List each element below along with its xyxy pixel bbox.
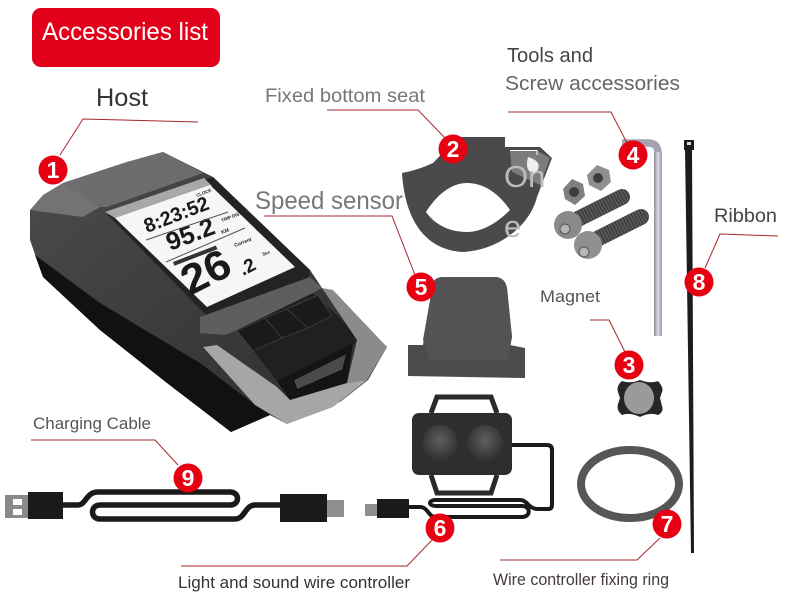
lower bezel band [200, 277, 322, 335]
icon: screws and nuts [554, 165, 641, 259]
icon: charging cable [5, 492, 344, 522]
callout: number badges: 4 [627, 142, 640, 168]
title: accessories list [32, 8, 220, 67]
display readouts [141, 187, 271, 304]
icon: magnet [618, 380, 662, 417]
icon: speed sensor [408, 277, 525, 378]
body silhouette [30, 152, 387, 432]
label: light and sound wire controller: Light and sound wire controller [178, 573, 410, 592]
display readouts: 26 [173, 239, 239, 304]
display readouts: TRIP DIST [221, 210, 243, 223]
text: stray on e overlay: On [504, 159, 545, 194]
icon: fixing ring [581, 450, 679, 518]
icon: light and sound wire controller [365, 397, 552, 518]
text: stray on e overlay [504, 159, 545, 244]
display readouts: CLOCK [196, 187, 213, 198]
callout: number badges: 9 [182, 465, 194, 491]
callout: number badges [38, 134, 714, 542]
label: fixed bottom seat: Fixed bottom seat [265, 85, 426, 107]
buttons [237, 318, 282, 351]
label: ribbon: Ribbon [714, 206, 777, 227]
label: tools and screw accessories: Tools and [507, 45, 593, 67]
callout: number badges: 6 [434, 515, 446, 541]
icon: fixed bottom seat [402, 137, 552, 252]
label: charging cable: Charging Cable [33, 414, 151, 433]
label: magnet: Magnet [540, 287, 600, 306]
callout: number badges: 1 [47, 157, 60, 183]
top ridge [63, 152, 203, 207]
button panel [237, 293, 360, 381]
icon: ribbon cable tie [684, 140, 694, 553]
display readouts: 95.2 [162, 213, 219, 257]
display readouts: KM [221, 227, 230, 236]
callout: leader lines [31, 110, 778, 566]
display readouts: .2 [236, 254, 260, 280]
callout: number badges: 5 [415, 274, 428, 300]
callout: number badges: 2 [447, 136, 459, 162]
label: host: Host [96, 84, 148, 112]
screen bezel [105, 177, 310, 316]
display readouts: 8:23:52 [141, 193, 212, 238]
title: accessories list: Accessories list [42, 18, 208, 46]
display readouts: Current [234, 237, 253, 249]
icon: host device [30, 152, 387, 432]
label: speed sensor: Speed sensor [255, 187, 403, 215]
icon: hex key [622, 143, 662, 336]
label: wire controller fixing ring: Wire controller fixing ring [493, 571, 669, 589]
black underside [35, 255, 270, 432]
display readouts: Sec [262, 249, 271, 257]
callout: number badges: 7 [661, 511, 673, 537]
grey front bezels [322, 288, 387, 383]
label: tools and screw accessories [505, 45, 680, 95]
screen [115, 185, 295, 307]
text: stray on e overlay: e [504, 209, 521, 244]
label: tools and screw accessories: Screw accessories [505, 73, 680, 95]
callout: number badges: 3 [623, 352, 635, 378]
callout: number badges: 8 [693, 269, 706, 295]
lens slot [293, 353, 347, 390]
